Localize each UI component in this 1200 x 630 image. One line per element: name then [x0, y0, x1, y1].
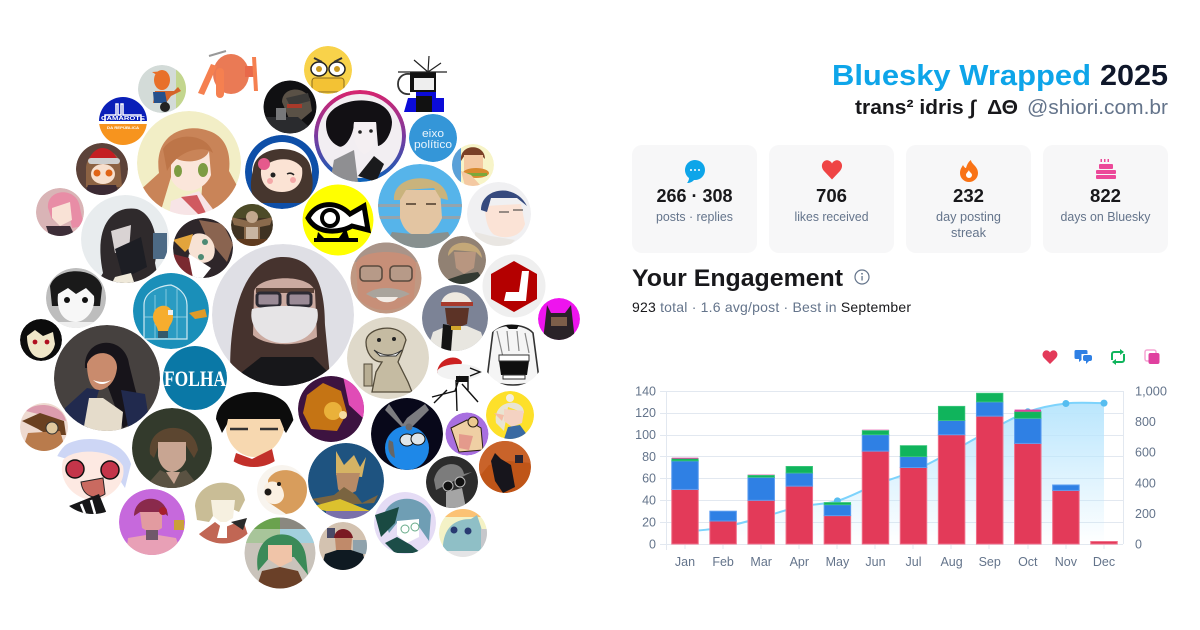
month labels: Apr [790, 555, 809, 569]
avatar: Folha logo [163, 346, 227, 410]
left axis labels: 0 [649, 538, 656, 552]
month labels: Feb [712, 555, 734, 569]
month labels [675, 555, 1115, 569]
avatar: man in white cap [422, 285, 488, 351]
avatar: teal haired glasses anime [374, 492, 436, 554]
avatar: yellow elf with white hair [486, 391, 534, 439]
avatar: blond man looking down [438, 236, 486, 284]
avatar: blonde sketch character [195, 483, 249, 544]
engagement summary: 923 total · 1.6 avg/post · Best in September [632, 299, 911, 315]
avatar: J red hexagon logo [482, 254, 546, 318]
left axis labels: 140 [635, 384, 656, 398]
avatar: orange robot [198, 51, 258, 98]
avatar: fiery orange and purple blob [298, 376, 364, 442]
avatar: sanji manga face [487, 325, 539, 385]
chart legend [1043, 349, 1160, 365]
avatar: golden crowned character [308, 443, 384, 519]
avatar: crash bandicoot [138, 65, 186, 113]
avatar: pale teal blob with eyes [439, 509, 489, 557]
left axis labels: 80 [642, 450, 656, 464]
icon: heart [822, 160, 842, 180]
title: 2025 [1100, 60, 1168, 92]
cumulative line [685, 400, 1108, 532]
panel: day posting streak: streak [951, 226, 987, 240]
panel: day posting streak: 232 [953, 185, 984, 206]
avatar: dark figure with outstretched arms [231, 204, 273, 247]
month labels: Oct [1018, 555, 1038, 569]
avatar: greyscale man in hat [426, 456, 478, 508]
avatar: man in red cap [319, 522, 367, 570]
avatar: black cat on orange [479, 441, 531, 493]
month labels: Sep [979, 555, 1001, 569]
left axis labels: 40 [642, 494, 656, 508]
month labels: Mar [750, 555, 772, 569]
avatar: woman in mask (largest) [212, 244, 354, 387]
right axis labels [1135, 384, 1167, 552]
right axis labels: 600 [1135, 446, 1156, 460]
icon: quote squares [1145, 350, 1160, 364]
avatar: blond man with closed eyes [378, 164, 462, 248]
month labels: Nov [1055, 555, 1078, 569]
avatar: dark hair man with red glasses [263, 80, 316, 134]
icon: repost arrows [1112, 349, 1124, 365]
icon: likes heart [1043, 350, 1057, 364]
icon: cake [1096, 159, 1116, 179]
left axis labels: 60 [642, 472, 656, 486]
avatar: dark hair covering face [81, 195, 169, 285]
avatar: purple border blonde sketch [446, 412, 488, 456]
panel: day posting streak [906, 145, 1031, 253]
avatar: godzilla sketch [347, 317, 429, 399]
panel: day posting streak: day posting [936, 210, 1001, 224]
avatar: camarote logo: DA REPÚBLICA [107, 125, 139, 130]
avatar: black and white manga face [46, 268, 106, 328]
avatar cluster [20, 46, 580, 589]
panel: likes received: 706 [816, 185, 847, 206]
avatar: santa hat martian tripod [432, 358, 481, 411]
right axis labels: 0 [1135, 538, 1142, 552]
icon: info [855, 270, 869, 284]
avatar: anime girl sideways [173, 218, 233, 278]
avatar: man with dark blue hair [467, 182, 531, 246]
avatar: camarote logo [99, 97, 147, 146]
right axis labels: 800 [1135, 415, 1156, 429]
month labels: May [826, 555, 850, 569]
avatar: chibi girl shouting [58, 439, 131, 514]
user name and handle: @shiori.com.br [1027, 97, 1168, 119]
avatar: yellow fish eye logo [302, 184, 374, 256]
avatar: camarote logo: CAMAROTE [101, 116, 146, 122]
right axis labels: 200 [1135, 507, 1156, 521]
panel: days on Bluesky: 822 [1090, 185, 1121, 206]
panel: days on Bluesky: days on Bluesky [1060, 210, 1151, 224]
avatar: Folha logo: FOLHA [164, 366, 226, 391]
avatar: golden dog [257, 465, 308, 515]
left axis labels: 20 [642, 516, 656, 530]
avatar: magenta dark cat girl [538, 298, 580, 340]
panel: days on Bluesky [1043, 145, 1168, 253]
left axis labels [635, 384, 656, 552]
avatar: eixo politico logo: eixo [422, 128, 444, 140]
user name and handle [855, 97, 1168, 119]
avatar: smiling woman in blazer [54, 325, 160, 432]
avatar: manga man with black hair [214, 387, 294, 467]
avatar: girl eating burger [452, 144, 494, 186]
avatar: pink hair girl [36, 188, 84, 238]
month labels: Jun [865, 555, 886, 569]
month labels: Aug [940, 555, 963, 569]
icon: replies bubbles [1074, 350, 1092, 364]
avatar: dark hair red eyes [20, 319, 62, 361]
avatar: woman in pink light [119, 489, 185, 555]
avatar: woman with ink drawing and gradient ring [314, 90, 406, 182]
avatar: old man with glasses and moustache [350, 242, 422, 314]
avatar: young man with long brown hair [132, 408, 212, 488]
avatar: woman with hair and flower on blue ring [245, 135, 319, 209]
panel: posts and replies: posts · replies [656, 210, 733, 224]
avatar: yellow pikachu face [304, 46, 352, 94]
icon: flame [960, 160, 978, 182]
avatar: blue ball with propeller in space [371, 398, 443, 470]
user name and handle: trans² idris ∫ ΔΘ [855, 97, 1018, 119]
title: Bluesky Wrapped [832, 60, 1091, 92]
panel: posts and replies: 266 · 308 [656, 185, 732, 206]
left axis labels: 100 [635, 428, 656, 442]
panel: posts and replies [632, 145, 757, 253]
avatar: eixo politico logo: político [414, 139, 452, 151]
avatar: pink hat glasses [20, 403, 68, 451]
month labels: Jan [675, 555, 695, 569]
heading: Your Engagement: Your Engagement [632, 265, 843, 292]
right axis labels: 400 [1135, 476, 1156, 490]
month labels: Dec [1093, 555, 1115, 569]
stacked bar and line chart [635, 384, 1167, 569]
avatar: green hair character [244, 517, 316, 589]
left axis labels: 120 [635, 406, 656, 420]
panel: likes received [769, 145, 894, 253]
avatar: birdcage with light bulb [133, 273, 209, 349]
avatar: anime girl with orange hair [137, 111, 241, 217]
icon: chat bubble [685, 160, 705, 183]
bars [672, 393, 1117, 544]
cumulative area [685, 403, 1104, 544]
avatar: eixo politico logo [409, 114, 457, 162]
avatar: santa hat chibi [76, 143, 128, 197]
right axis labels: 1,000 [1135, 384, 1167, 398]
panel: likes received: likes received [794, 210, 869, 224]
month labels: Jul [906, 555, 921, 569]
avatar: sketch mug figure [398, 56, 447, 112]
